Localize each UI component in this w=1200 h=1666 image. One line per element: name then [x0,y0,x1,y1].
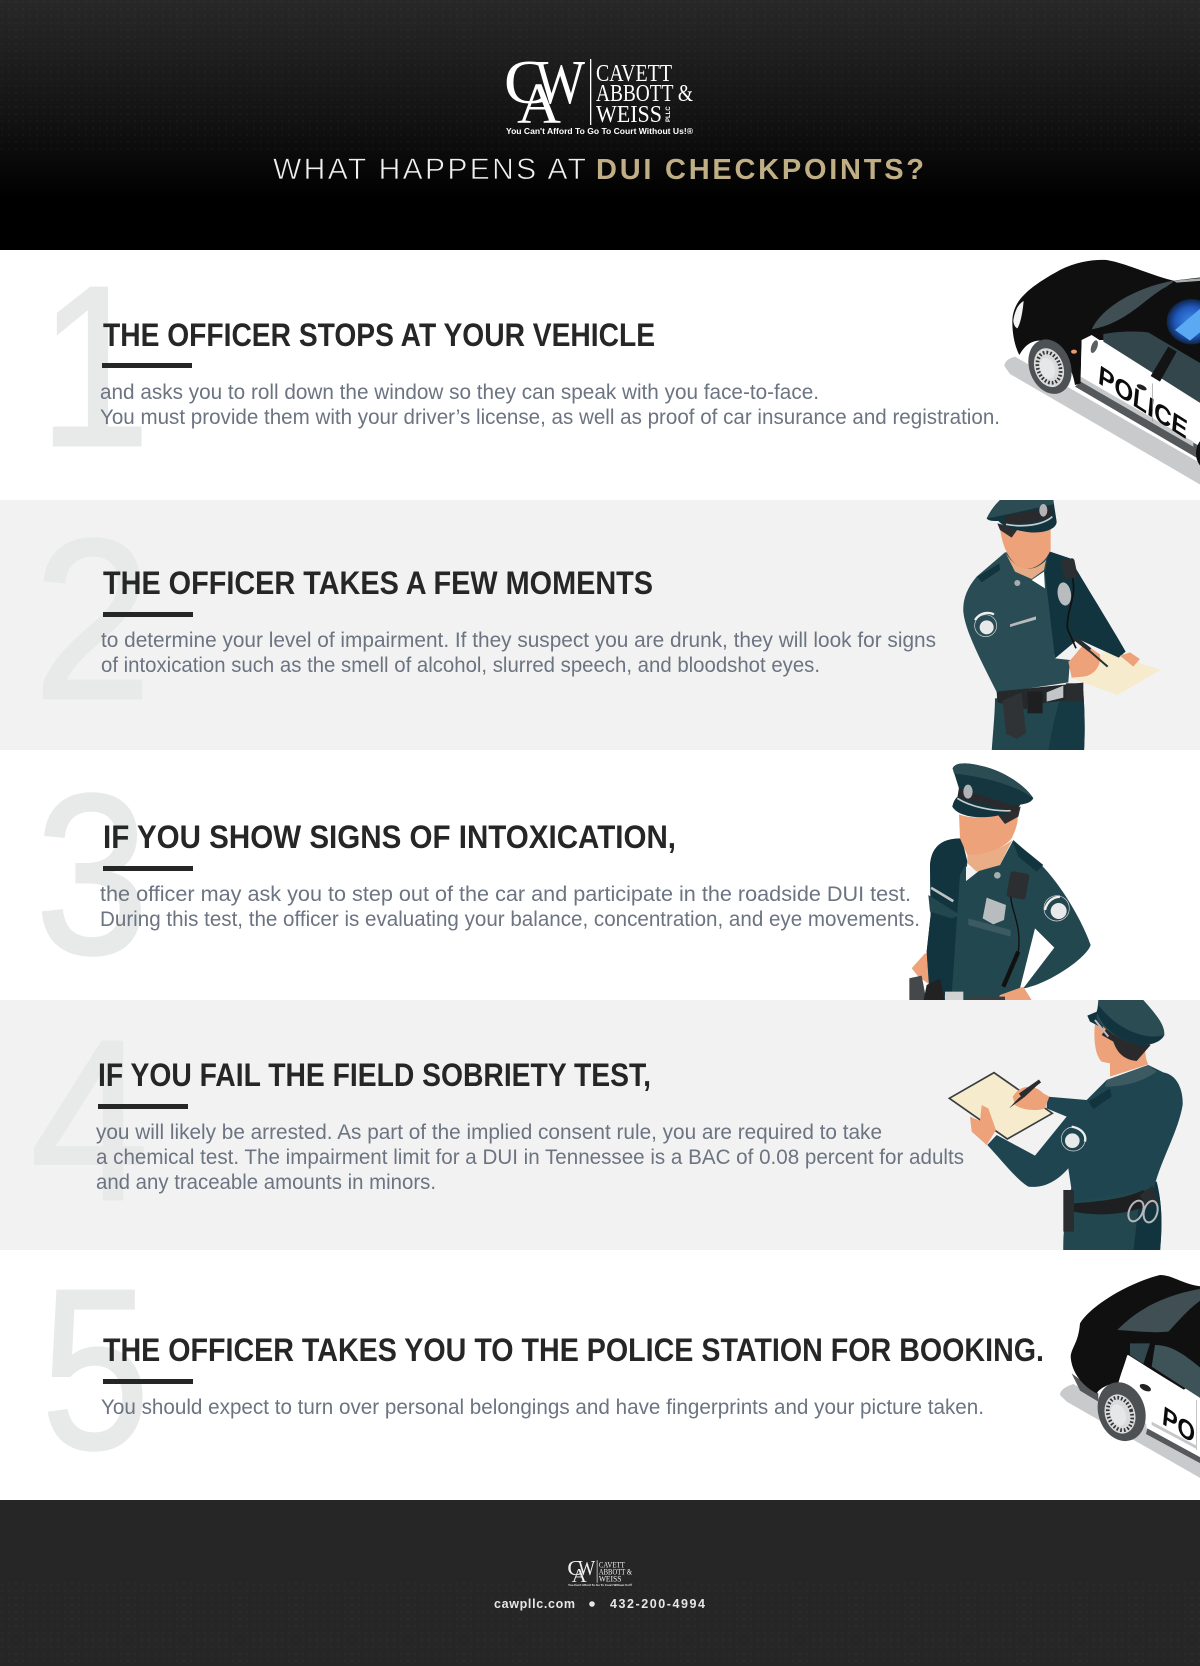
logo: PLLC [666,106,672,122]
numeral 1: 1 [39,240,150,494]
title: DUI CHECKPOINTS? [596,154,924,186]
logo: ABBOTT & [596,80,693,107]
illustration: police car front [1004,260,1200,488]
numeral 2: 2 [34,493,152,747]
title [273,153,924,186]
logo: A [517,71,561,136]
logo: W [535,49,585,117]
footer logo: W [578,1556,595,1580]
body 3: the officer may ask you to step out of the car and participate in the roadside DUI test. [100,883,911,906]
band 2 background [0,500,1200,750]
footer logo: CAVETT [599,1561,625,1570]
logo: WEISS [596,101,662,128]
body 1 [100,381,1000,429]
footer logo: A [572,1565,588,1587]
body 5: You should expect to turn over personal belongings and have fingerprints and your picture taken. [101,1396,984,1419]
step 3 panel [36,748,1091,1003]
illustration: police car rear: PO [1161,1400,1196,1450]
body 4: and any traceable amounts in minors. [96,1171,436,1194]
body 2 [101,629,936,677]
footer logo: ABBOTT & [599,1568,632,1577]
footer logo: WEISS [599,1575,622,1584]
logo [504,49,694,136]
heading 5: THE OFFICER TAKES YOU TO THE POLICE STATION FOR BOOKING. [103,1332,1044,1368]
body 1: and asks you to roll down the window so they can speak with you face-to-face. [100,381,819,404]
footer logo [567,1556,633,1587]
logo: C [504,49,548,117]
footer contact: cawpllc.com [494,1597,575,1611]
body 2: of intoxication such as the smell of alcohol, slurred speech, and bloodshot eyes. [101,654,820,677]
illustration: officer writing, front [963,500,1161,752]
step 5 panel [48,1275,1200,1478]
footer logo: You Can't Afford To Go To Court Without Us!® [568,1583,633,1587]
body 1: You must provide them with your driver’s license, as well as proof of car insurance and registration. [100,406,1000,429]
body 4: a chemical test. The impairment limit for a DUI in Tennessee is a BAC of 0.08 percent for adults [96,1146,964,1169]
numeral 3: 3 [36,748,148,1002]
footer logo: C [567,1556,582,1580]
body 3: During this test, the officer is evaluating your balance, concentration, and eye movements. [100,908,920,931]
body 4 [96,1121,964,1194]
footer panel [0,1500,1200,1666]
step 2 panel [34,493,1161,752]
title: WHAT HAPPENS AT [273,153,586,186]
logo: CAVETT [596,60,672,87]
numeral 4: 4 [30,994,148,1248]
heading 2: THE OFFICER TAKES A FEW MOMENTS [103,565,653,601]
header panel [0,0,1200,250]
footer contact [494,1597,705,1611]
step 4 panel [30,994,1183,1252]
illustration: officer writing, back [949,1000,1183,1252]
illustration: officer hands on hips [909,763,1091,1003]
step 1 panel [53,260,1200,484]
illustration: police car rear [1060,1275,1200,1482]
body 4: you will likely be arrested. As part of the implied consent rule, you are required to take [96,1121,882,1144]
illustration: police car front: POLICE [1097,359,1189,445]
footer contact: 432-200-4994 [610,1597,705,1611]
body 3 [100,883,920,931]
logo: You Can't Afford To Go To Court Without Us!® [506,126,694,136]
heading 1: THE OFFICER STOPS AT YOUR VEHICLE [103,317,655,353]
numeral 5: 5 [42,1243,150,1497]
heading 3: IF YOU SHOW SIGNS OF INTOXICATION, [103,819,676,855]
body 2: to determine your level of impairment. If they suspect you are drunk, they will look for signs [101,629,936,652]
heading 4: IF YOU FAIL THE FIELD SOBRIETY TEST, [98,1057,651,1093]
band 4 background [0,1000,1200,1250]
